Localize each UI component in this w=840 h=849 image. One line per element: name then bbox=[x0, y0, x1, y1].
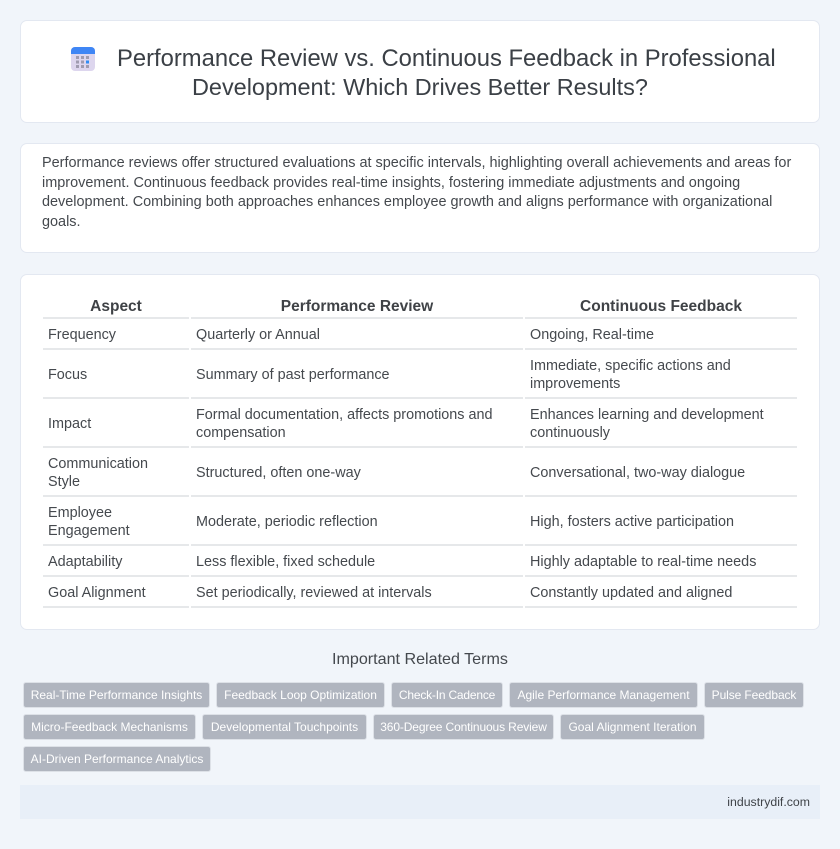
comparison table: Structured, often one-way bbox=[196, 465, 361, 481]
comparison table: Style bbox=[48, 474, 80, 490]
comparison table: Performance Review bbox=[281, 298, 433, 315]
comparison table: Focus bbox=[48, 367, 87, 383]
panel: header bbox=[20, 20, 820, 123]
related terms tags: AI-Driven Performance Analytics bbox=[31, 752, 203, 766]
text block: introduction: improvement. Continuous feedback provides real-time insights, fostering immediate adjustments and ongoing bbox=[42, 175, 740, 191]
title: Development: Which Drives Better Results? bbox=[192, 74, 648, 100]
related terms tags: Check-In Cadence bbox=[399, 688, 495, 702]
comparison table: High, fosters active participation bbox=[530, 514, 734, 530]
comparison table: Adaptability bbox=[48, 554, 122, 570]
related terms tags: Pulse Feedback bbox=[712, 688, 796, 702]
comparison table bbox=[43, 298, 797, 608]
comparison table: Continuous Feedback bbox=[580, 298, 742, 315]
comparison table: Enhances learning and development bbox=[530, 407, 764, 423]
related terms tags: Feedback Loop Optimization bbox=[224, 688, 377, 702]
comparison table: Impact bbox=[48, 416, 91, 432]
related terms tags: Real-Time Performance Insights bbox=[31, 688, 202, 702]
comparison table: Ongoing, Real-time bbox=[530, 327, 654, 343]
related terms tags: Micro-Feedback Mechanisms bbox=[31, 720, 188, 734]
comparison table: Aspect bbox=[90, 298, 142, 315]
comparison table: Engagement bbox=[48, 523, 130, 539]
comparison table: Highly adaptable to real-time needs bbox=[530, 554, 756, 570]
related terms tags: Developmental Touchpoints bbox=[211, 720, 358, 734]
icon: calendar bbox=[71, 47, 95, 71]
comparison table: Conversational, two-way dialogue bbox=[530, 465, 745, 481]
comparison table: Employee bbox=[48, 505, 112, 521]
comparison table: Goal Alignment bbox=[48, 585, 146, 601]
related terms tags: Agile Performance Management bbox=[517, 688, 690, 702]
comparison table: Immediate, specific actions and bbox=[530, 358, 731, 374]
comparison table: Less flexible, fixed schedule bbox=[196, 554, 375, 570]
footer text: industrydif.com bbox=[727, 795, 810, 809]
comparison table: continuously bbox=[530, 425, 610, 441]
text block: introduction: development. Combining both approaches enhances employee growth and aligns performance with organizational bbox=[42, 194, 772, 210]
comparison table: Moderate, periodic reflection bbox=[196, 514, 378, 530]
comparison table: Frequency bbox=[48, 327, 116, 343]
comparison table: Constantly updated and aligned bbox=[530, 585, 732, 601]
comparison table: compensation bbox=[196, 425, 286, 441]
comparison table: improvements bbox=[530, 376, 620, 392]
title: Performance Review vs. Continuous Feedback in Professional bbox=[117, 45, 776, 72]
comparison table: Set periodically, reviewed at intervals bbox=[196, 585, 432, 601]
heading: related terms: Important Related Terms bbox=[332, 650, 508, 668]
title bbox=[117, 45, 776, 100]
text block: introduction: Performance reviews offer structured evaluations at specific intervals, highlighting overall achievements and areas for bbox=[42, 155, 791, 171]
related terms tags: Goal Alignment Iteration bbox=[568, 720, 697, 734]
comparison table: Formal documentation, affects promotions and bbox=[196, 407, 492, 423]
panel: introduction bbox=[20, 143, 820, 253]
related terms tags bbox=[23, 682, 804, 772]
comparison table: Quarterly or Annual bbox=[196, 327, 320, 343]
text block: introduction: goals. bbox=[42, 214, 81, 230]
panel: comparison table bbox=[20, 274, 820, 630]
footer bbox=[20, 785, 820, 819]
comparison table: Summary of past performance bbox=[196, 367, 390, 383]
comparison table: Communication bbox=[48, 456, 148, 472]
related terms tags: 360-Degree Continuous Review bbox=[380, 720, 547, 734]
text block: introduction bbox=[42, 155, 792, 230]
